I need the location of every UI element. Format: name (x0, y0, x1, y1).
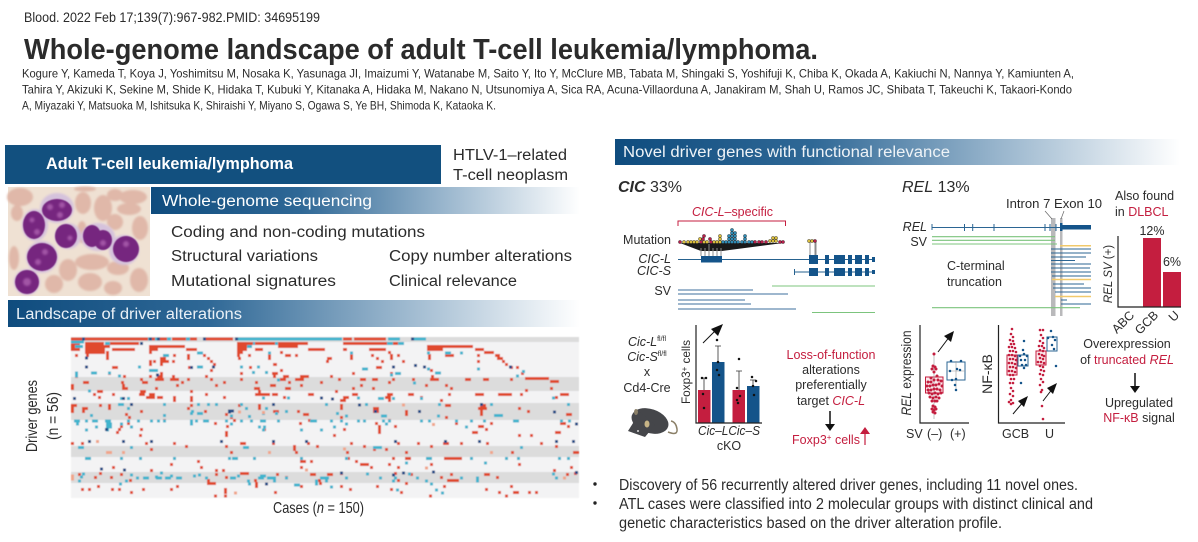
bar chart: REL SV in DLBCL: GCB (1132, 308, 1161, 337)
bar chart: REL SV in DLBCL: REL SV (+) (1103, 245, 1115, 303)
text: loss-of-function conclusion: + (827, 433, 832, 442)
dot plot: REL expression: SV (906, 427, 923, 441)
bar chart: REL SV in DLBCL: 6% (1163, 255, 1181, 269)
authors: Kogure Y, Kameda T, Koya J, Yoshimitsu M, Nosaka K, Yasunaga JI, Imaizumi Y, Watanabe M, Saito Y, Ito Y, McClure MB, Tabata M, Shingaki S, Yoshifuji K, Chiba K, Okada A, Kakiuchi N, Nannya Y, Kamiunten A, (22, 66, 1074, 80)
text: loss-of-function conclusion: Foxp3 (792, 433, 827, 447)
axis label: cases: Cases (n = 150) (273, 500, 364, 517)
gene labels: REL (903, 220, 927, 234)
dot plot: REL expression: (–) (927, 427, 942, 441)
bar chart: Foxp3+ cells: Foxp3 (679, 371, 693, 404)
axis label: driver genes (24, 380, 62, 452)
dot plot: NF-kB: U (1045, 427, 1054, 441)
dot plot: REL expression (898, 325, 969, 441)
text: sequencing analyses list: Copy number alterations (389, 248, 572, 265)
heading: CIC 33%: CIC 33% (618, 179, 682, 196)
panel: adult T-cell leukemia/lymphoma header: Adult T-cell leukemia/lymphoma (46, 154, 294, 173)
text: loss-of-function conclusion: preferentially (795, 378, 868, 392)
text: genotype: fl/fl (658, 351, 667, 358)
text: genotype: Cic-S (627, 350, 658, 364)
gene labels (623, 233, 672, 298)
text: HTLV-1-related T-cell neoplasm (453, 147, 568, 184)
bar chart: REL SV in DLBCL: 12% (1139, 224, 1165, 238)
gene labels: CIC-L (638, 252, 671, 266)
SV track lines (678, 286, 875, 312)
heading: REL 13%: REL 13% (902, 179, 970, 196)
heatmap: red alterations (71, 339, 579, 496)
dot plot: REL expression: REL expression (898, 330, 914, 416)
text: loss-of-function conclusion (787, 348, 876, 447)
gene labels: Mutation (623, 233, 671, 247)
bar chart: REL SV in DLBCL (1103, 224, 1182, 337)
text: REL conclusion: Overexpression (1083, 337, 1171, 351)
bar chart: REL SV in DLBCL: U (1166, 308, 1182, 325)
panel: whole-genome sequencing header: Whole-genome sequencing (162, 193, 372, 210)
text: key findings bullets: Discovery of 56 recurrently altered driver genes, including 11 novel ones. (619, 477, 1078, 494)
text: sequencing analyses list (171, 224, 572, 290)
text: C-terminal truncation: truncation (947, 275, 1002, 289)
authors: Tahira Y, Akizuki K, Sekine M, Shide K, Hidaka T, Kubuki Y, Kitanaka A, Hidaka M, Nakano N, Utsunomiya A, Sica RA, Acuna-Villaorduna A, Janakiram M, Shah U, Ramos JC, Shibata T, Takeuchi K, Takaori-Kondo (22, 82, 1072, 96)
bar chart: Foxp3+ cells: cKO (717, 439, 741, 453)
gene labels: SV (654, 284, 672, 298)
bar chart: Foxp3+ cells (679, 324, 762, 453)
gene labels: CIC-S (637, 264, 672, 278)
panel: landscape of driver alterations header: Landscape of driver alterations (16, 306, 242, 323)
text: genotype: fl/fl (657, 336, 666, 343)
gene models: CIC-L and CIC-S (678, 255, 875, 276)
text: key findings bullets: ATL cases were classified into 2 molecular groups with distinct clinical and (619, 496, 1093, 513)
label: intron 7 exon 10: Intron 7 Exon 10 (1006, 197, 1102, 211)
label: CIC-L specific bracket: CIC-L–specific (692, 205, 773, 219)
text: also found in DLBCL (1115, 189, 1174, 219)
text: HTLV-1-related T-cell neoplasm: HTLV-1–related (453, 147, 567, 164)
text: REL conclusion (1080, 337, 1175, 425)
text: sequencing analyses list: Mutational signatures (171, 273, 336, 290)
text: REL conclusion: Upregulated (1105, 396, 1173, 410)
heatmap: light salmon alterations (71, 405, 566, 493)
breakpoint columns (1045, 211, 1064, 316)
heatmap: blue-cyan alterations (71, 339, 571, 493)
authors: A, Miyazaki Y, Matsuoka M, Ishitsuka K, Shiraishi Y, Miyano S, Ogawa S, Ye BH, Shimoda K, Kataoka K. (22, 98, 496, 112)
label: CIC-L specific bracket (678, 205, 786, 226)
panel: CIC (618, 179, 876, 453)
bar chart: REL SV in DLBCL: ABC (1109, 308, 1137, 336)
bar chart: Foxp3+ cells: + (680, 366, 689, 371)
dot plot: NF-kB: GCB (1002, 427, 1029, 441)
SV tracks (932, 237, 1091, 308)
gene model: REL (932, 223, 1091, 231)
text: loss-of-function conclusion: Loss-of-function (787, 348, 876, 362)
dot plot: NF-kB: NF-κB (979, 354, 995, 394)
panel: landscape of driver alterations header (8, 300, 580, 327)
title: Whole-genome landscape of adult T-cell leukemia/lymphoma. (24, 34, 818, 66)
text: HTLV-1-related T-cell neoplasm: T-cell neoplasm (453, 167, 568, 184)
authors (22, 66, 1074, 112)
panel: REL (898, 179, 1182, 441)
text: loss-of-function conclusion: target CIC-L (797, 394, 865, 408)
text: also found in DLBCL: in DLBCL (1115, 205, 1169, 219)
icon: mouse (628, 404, 677, 438)
bar chart: Foxp3+ cells: Cic–LCic–S (698, 424, 761, 438)
image: blood smear micrograph (7, 186, 150, 296)
panel: novel driver genes header: Novel driver genes with functional relevance (623, 144, 950, 161)
dot plot: REL expression: (+) (950, 427, 966, 441)
dot plot: NF-kB (979, 325, 1065, 441)
text: REL conclusion: NF-κB signal (1103, 411, 1175, 425)
text: sequencing analyses list: Structural variations (171, 248, 318, 265)
citation: Blood. 2022 Feb 17;139(7):967-982.PMID: 34695199 (24, 9, 320, 25)
text: key findings bullets (593, 477, 1093, 532)
axis label: driver genes: (n = 56) (45, 392, 62, 440)
text: loss-of-function conclusion: alterations (802, 363, 860, 377)
chart: driver gene heatmap (71, 337, 579, 498)
text: sequencing analyses list: Clinical relevance (389, 273, 517, 290)
text: key findings bullets: genetic characteristics based on the driver alteration profile. (619, 515, 1002, 532)
panel: whole-genome sequencing header (151, 187, 580, 214)
text: genotype: Cd4-Cre (623, 381, 671, 395)
lollipop mutation plot (678, 228, 817, 259)
heatmap: navy alterations (73, 339, 578, 484)
bar chart: Foxp3+ cells: cells (679, 340, 693, 367)
text: C-terminal truncation (947, 259, 1005, 289)
text: genotype: Cic-L (628, 335, 657, 349)
gene labels (903, 220, 928, 249)
panel: novel driver genes header (615, 139, 1180, 165)
text: REL conclusion: of truncated REL (1080, 353, 1174, 367)
text: also found in DLBCL: Also found (1115, 189, 1174, 203)
text: loss-of-function conclusion: cells (831, 433, 860, 447)
axis label: driver genes: Driver genes (24, 380, 41, 452)
text: sequencing analyses list: Coding and non-coding mutations (171, 224, 425, 241)
text: genotype (623, 335, 671, 395)
panel: adult T-cell leukemia/lymphoma header (5, 145, 441, 184)
gene labels: SV (910, 235, 928, 249)
text: genotype: x (644, 365, 651, 379)
text: C-terminal truncation: C-terminal (947, 259, 1005, 273)
